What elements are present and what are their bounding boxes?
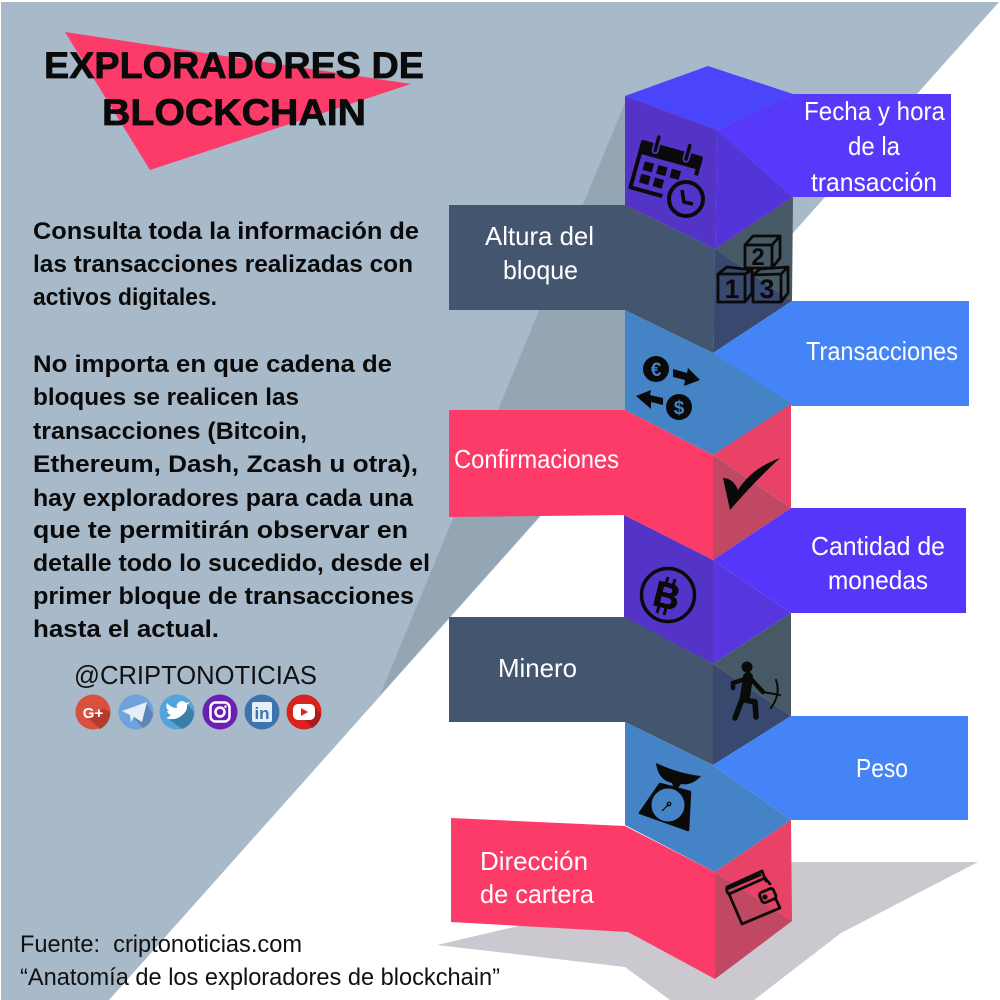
ribbon: confirmaciones: [449, 410, 713, 560]
right face lower: [713, 455, 791, 560]
explanation paragraph: que te permitirán observar en: [33, 517, 408, 544]
label: transacciones: Transacciones: [806, 336, 958, 366]
top face: [625, 66, 793, 130]
intro paragraph: las transacciones realizadas con: [33, 251, 413, 278]
explanation paragraph: hay exploradores para cada una: [33, 485, 414, 512]
intro paragraph: [33, 218, 419, 311]
icon: telegram: [118, 694, 154, 730]
label: direccion de cartera: [480, 846, 595, 909]
ribbon: altura del bloque: [449, 205, 715, 353]
icon: bitcoin: B: [649, 572, 684, 619]
label: confirmaciones: Confirmaciones: [454, 444, 619, 474]
face: [625, 722, 791, 872]
icon: numbered cubes: 1: [724, 274, 740, 304]
explanation paragraph: bloques se realicen las: [33, 384, 299, 411]
label: minero: Minero: [498, 653, 577, 683]
label: cantidad de monedas: Cantidad de: [811, 531, 945, 561]
block 7: weight: [625, 716, 968, 872]
floor shadow: [437, 862, 978, 1000]
icon: google plus: [76, 694, 110, 730]
icon: instagram: [202, 694, 238, 730]
label: fecha y hora: transacción: [811, 167, 937, 197]
label: peso: Peso: [856, 753, 908, 783]
icon: kitchen scale: [640, 763, 701, 830]
ribbon: transacciones: [713, 301, 969, 406]
right face upper: [713, 404, 791, 508]
explanation paragraph: detalle todo lo sucedido, desde el: [33, 550, 430, 577]
icon: calendar with clock: [630, 133, 703, 216]
block 8: wallet address: [451, 818, 792, 979]
icon: currency exchange: €: [651, 360, 662, 381]
title: BLOCKCHAIN: [102, 92, 366, 133]
right face: [713, 560, 791, 664]
block 1: date and time: [625, 66, 951, 249]
icon: currency exchange: [636, 356, 700, 420]
ribbon: minero: [449, 617, 713, 765]
right face: [715, 130, 793, 249]
label: fecha y hora: Fecha y hora: [804, 96, 945, 126]
title: EXPLORADORES DE: [44, 45, 424, 86]
right face upper: [715, 820, 792, 921]
title highlight triangle: [65, 32, 411, 170]
face: [625, 310, 792, 455]
icon: check mark: [723, 458, 780, 510]
source footer: “Anatomía de los exploradores de blockchain”: [20, 964, 500, 991]
source footer: Fuente: criptonoticias.com: [20, 931, 302, 958]
icon: bitcoin: [642, 568, 694, 622]
explanation paragraph: [33, 351, 430, 643]
left face: [625, 96, 717, 249]
ribbon: direccion de cartera: [451, 818, 715, 979]
handle: @CRIPTONOTICIAS: [74, 660, 317, 690]
intro paragraph: Consulta toda la información de: [33, 218, 419, 245]
label: direccion de cartera: de cartera: [480, 879, 595, 909]
block 4: confirmations: [449, 404, 791, 560]
block 5: coin amount: [624, 508, 966, 664]
icon: numbered cubes: 2: [751, 244, 765, 271]
right face upper: [713, 613, 791, 716]
title: [44, 45, 424, 133]
ribbon: cantidad de monedas: [713, 508, 966, 613]
block 6: miner: [449, 613, 791, 765]
icon: google plus: G+: [83, 705, 103, 722]
explanation paragraph: hasta el actual.: [33, 616, 219, 643]
label: altura del bloque: [485, 221, 594, 285]
ribbon: fecha y hora: [717, 94, 951, 197]
right face upper: [715, 197, 793, 301]
block 2: block height: [449, 197, 793, 353]
right face lower: [713, 249, 792, 353]
label: fecha y hora: [804, 96, 945, 197]
social icons: [76, 694, 322, 730]
label: cantidad de monedas: [811, 531, 945, 595]
label: direccion de cartera: Dirección: [480, 846, 588, 876]
icon: miner with pickaxe: [733, 662, 780, 718]
label: fecha y hora: de la: [848, 131, 900, 161]
ribbon: peso: [713, 716, 968, 820]
label: altura del bloque: Altura del: [485, 221, 594, 251]
right face lower: [713, 664, 791, 765]
source footer: [20, 931, 500, 991]
intro paragraph: activos digitales.: [33, 284, 217, 311]
block 3: transactions: [625, 301, 969, 455]
explanation paragraph: primer bloque de transacciones: [33, 583, 414, 610]
icon: currency exchange: $: [674, 398, 685, 419]
icon: linkedin: [244, 694, 280, 730]
icon: youtube: [286, 694, 322, 730]
icon: wallet: [727, 871, 780, 924]
label: altura del bloque: bloque: [503, 255, 578, 285]
background: darker diagonal band: [380, 103, 625, 695]
icon: twitter: [160, 694, 194, 730]
explanation paragraph: Ethereum, Dash, Zcash u otra),: [33, 451, 418, 478]
icon: linkedin: in: [254, 704, 270, 723]
left face: [624, 515, 713, 664]
explanation paragraph: No importa en que cadena de: [33, 351, 392, 378]
explanation paragraph: transacciones (Bitcoin,: [33, 418, 307, 445]
icon: numbered cubes: 3: [759, 274, 775, 304]
label: cantidad de monedas: monedas: [828, 565, 928, 595]
right face lower: [715, 872, 792, 979]
icon: numbered cubes: [718, 236, 788, 304]
